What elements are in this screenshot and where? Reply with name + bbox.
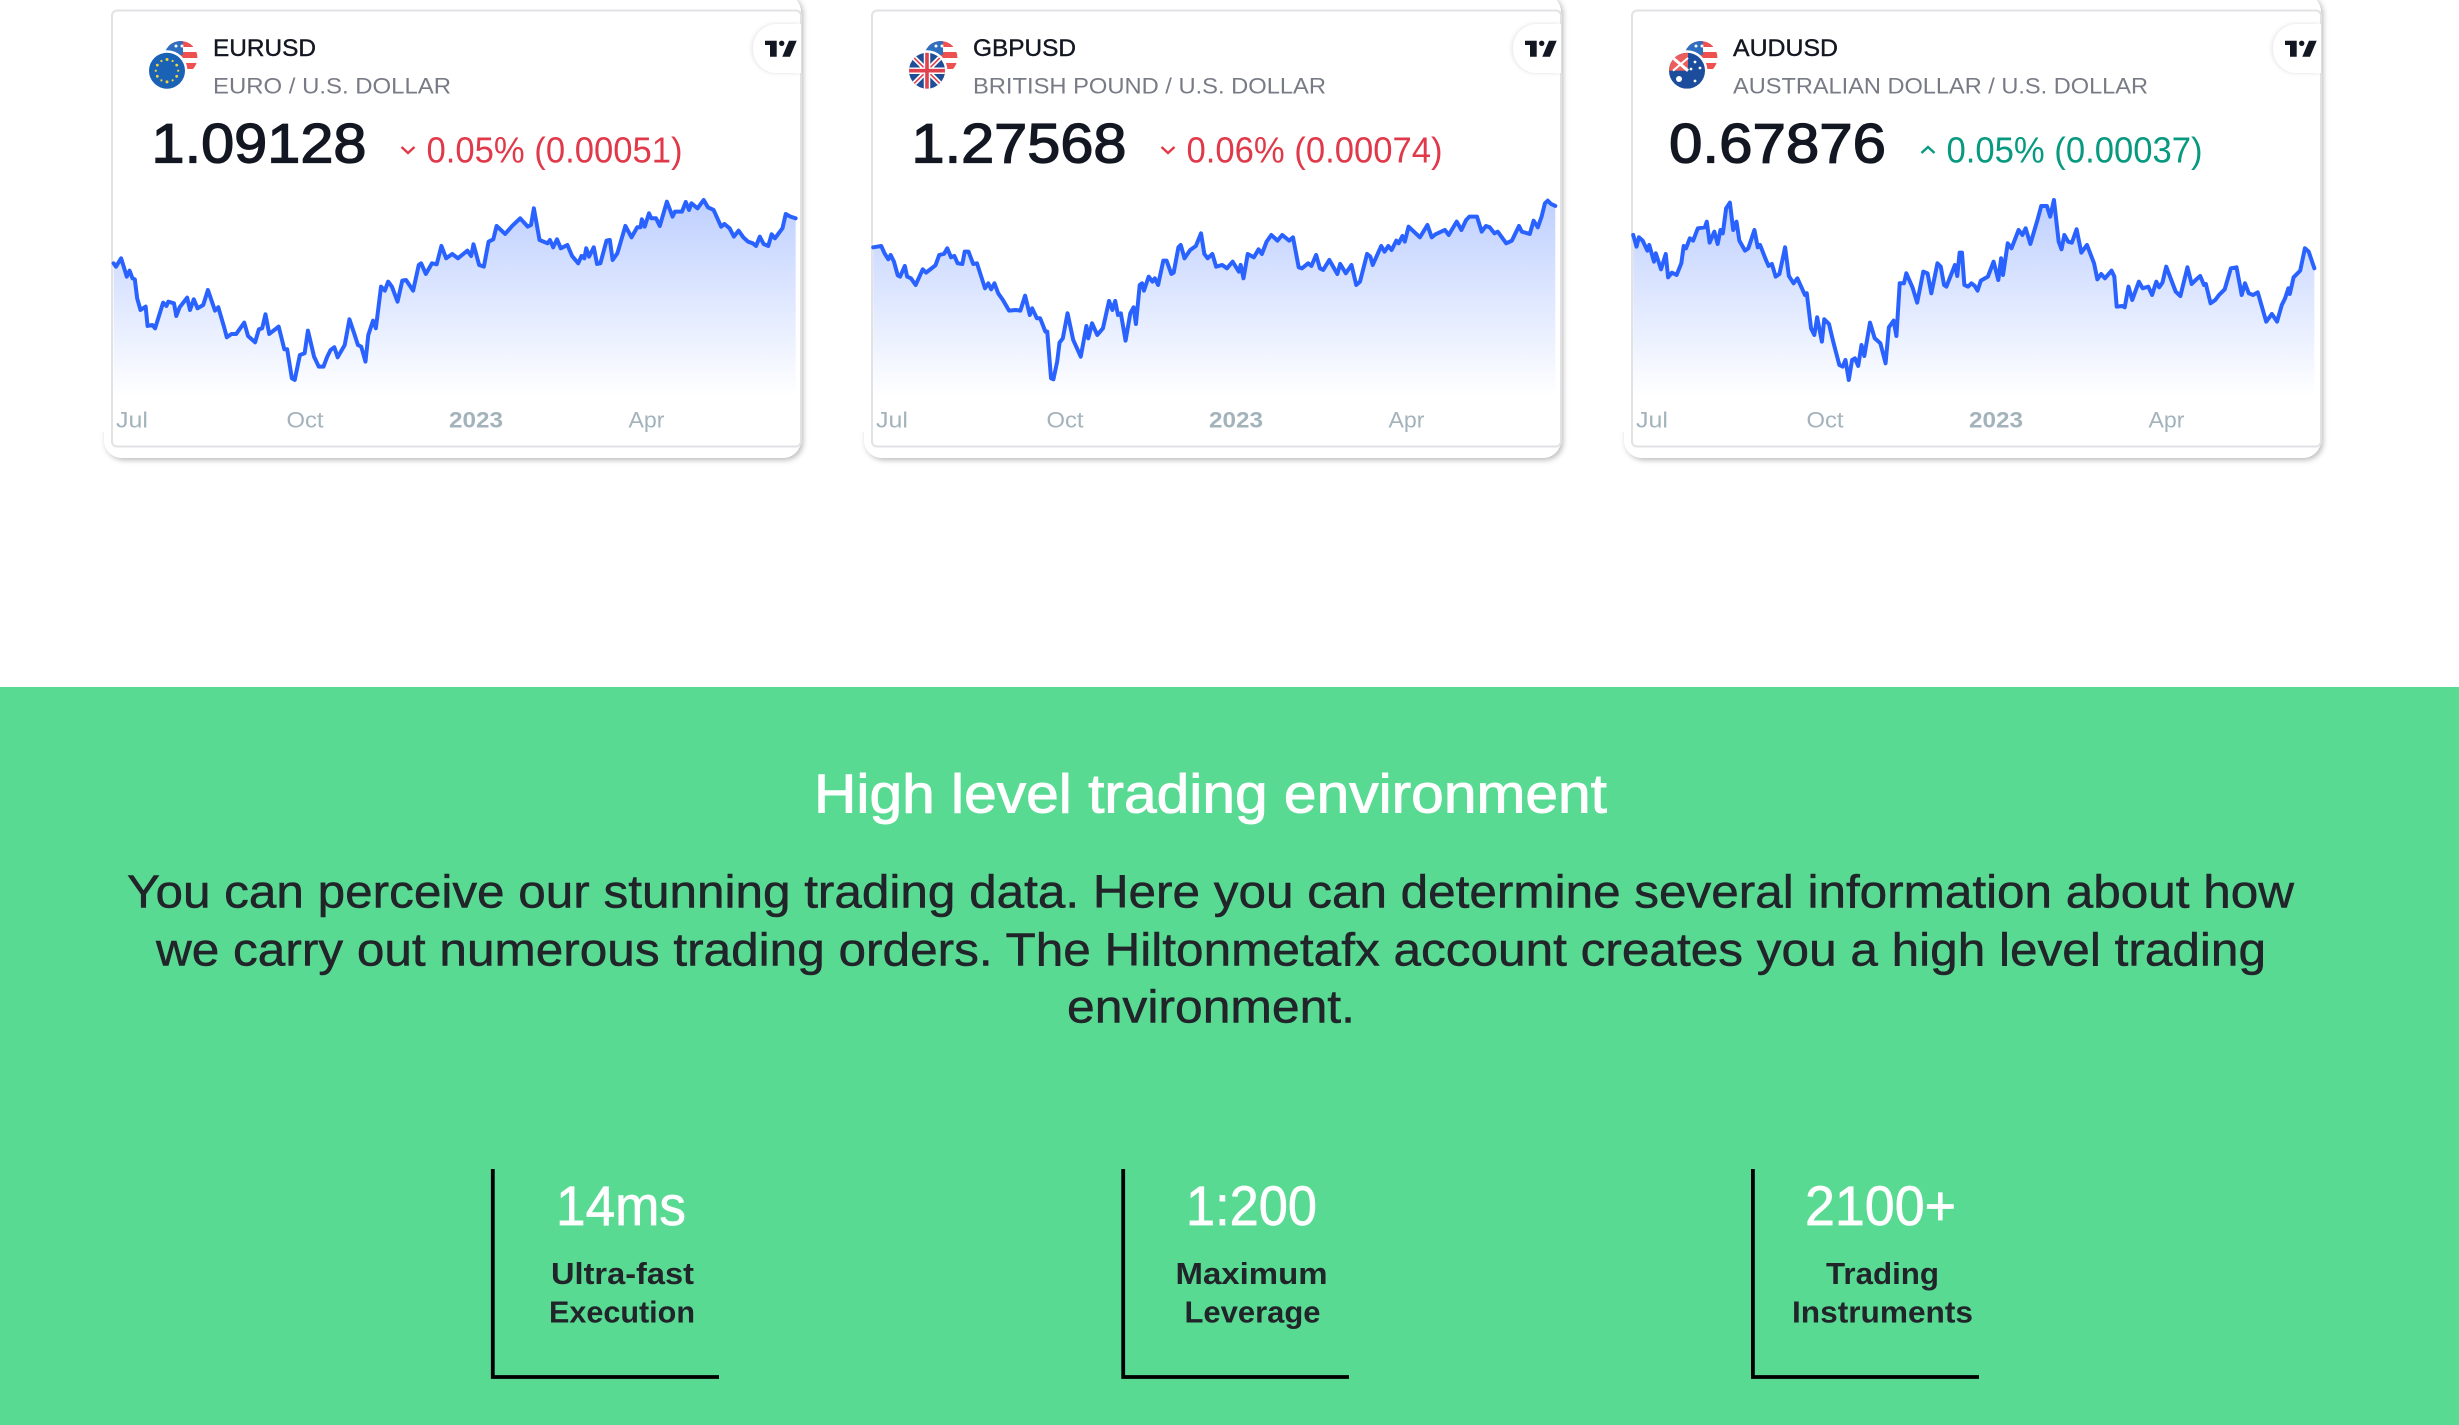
stat: 2100+ instruments: 2100+ — [1805, 1174, 1956, 1237]
text: AUDUSD price: 0.67876 — [1669, 112, 1886, 174]
text block: description: environment. — [1067, 981, 1355, 1033]
icon: EUR and USD flags — [149, 41, 198, 89]
icon: TradingView logo — [2273, 24, 2321, 73]
stat: 14ms execution: 14ms — [556, 1174, 686, 1237]
text: EURUSD change: 0.05% (0.00051) — [426, 130, 682, 171]
text: time axis labels: Apr — [1388, 408, 1424, 433]
panel: AUDUSD card — [1610, 0, 2321, 458]
text: GBPUSD symbol: GBPUSD — [973, 35, 1076, 62]
text: AUDUSD symbol: AUDUSD — [1733, 35, 1838, 62]
heading: High level trading environment — [814, 763, 1607, 825]
text: time axis labels: Apr — [628, 408, 664, 433]
icon: down chevron — [1162, 147, 1174, 153]
stat: 14ms execution: Execution — [549, 1294, 695, 1329]
text: AUDUSD change: 0.05% (0.00037) — [1946, 130, 2202, 171]
area chart: AUDUSD — [1633, 200, 2314, 397]
text: GBPUSD name: BRITISH POUND / U.S. DOLLAR — [973, 73, 1326, 98]
panel: EURUSD card — [90, 0, 801, 458]
text block: description: we carry out numerous trading orders. The Hiltonmetafx account creates you a high level trading — [155, 924, 2266, 976]
text: time axis labels: Jul — [1636, 408, 1668, 433]
stat: 2100+ instruments: Instruments — [1792, 1294, 1973, 1329]
stat: 1:200 leverage: Maximum — [1176, 1256, 1328, 1291]
text: EURUSD name: EURO / U.S. DOLLAR — [213, 73, 451, 98]
panel: green trading environment section — [0, 687, 2459, 1425]
icon: AUD and USD flags — [1669, 41, 1718, 89]
icon: down chevron — [402, 147, 414, 153]
text block: description: You can perceive our stunning trading data. Here you can determine several information about how — [127, 866, 2295, 918]
text: time axis labels: Apr — [2148, 408, 2184, 433]
area chart: GBPUSD — [873, 201, 1555, 397]
text: time axis labels: Oct — [286, 408, 324, 433]
stat: 1:200 leverage: Leverage — [1184, 1294, 1320, 1329]
text: time axis labels: Jul — [876, 408, 908, 433]
icon: up chevron — [1922, 147, 1934, 153]
text: time axis labels — [116, 408, 664, 433]
stat: 14ms execution: Ultra-fast — [551, 1256, 694, 1291]
stat: 1:200 leverage — [1123, 1169, 1349, 1377]
text: time axis labels: Jul — [116, 408, 148, 433]
icon: GBP and USD flags — [909, 41, 958, 89]
icon: TradingView logo — [753, 24, 801, 73]
text: EURUSD symbol: EURUSD — [213, 35, 316, 62]
text: GBPUSD price: 1.27568 — [912, 112, 1126, 174]
text block: description — [127, 866, 2295, 1033]
text: GBPUSD change: 0.06% (0.00074) — [1186, 130, 1442, 171]
text: EURUSD price: 1.09128 — [152, 112, 366, 174]
stat: 14ms execution — [493, 1169, 719, 1377]
panel: GBPUSD card — [850, 0, 1561, 458]
text: AUDUSD name: AUSTRALIAN DOLLAR / U.S. DOLLAR — [1733, 73, 2148, 98]
text: time axis labels: 2023 — [1209, 408, 1263, 433]
stat: 2100+ instruments — [1753, 1169, 1979, 1377]
text: time axis labels — [1636, 408, 2184, 433]
area chart: EURUSD — [114, 200, 796, 397]
text: time axis labels: Oct — [1046, 408, 1084, 433]
icon: TradingView logo — [1513, 24, 1561, 73]
text: time axis labels: 2023 — [1969, 408, 2023, 433]
text: time axis labels: 2023 — [449, 408, 503, 433]
stat: 1:200 leverage: 1:200 — [1186, 1174, 1317, 1237]
text: time axis labels: Oct — [1806, 408, 1844, 433]
text: time axis labels — [876, 408, 1424, 433]
stat: 2100+ instruments: Trading — [1826, 1256, 1939, 1291]
